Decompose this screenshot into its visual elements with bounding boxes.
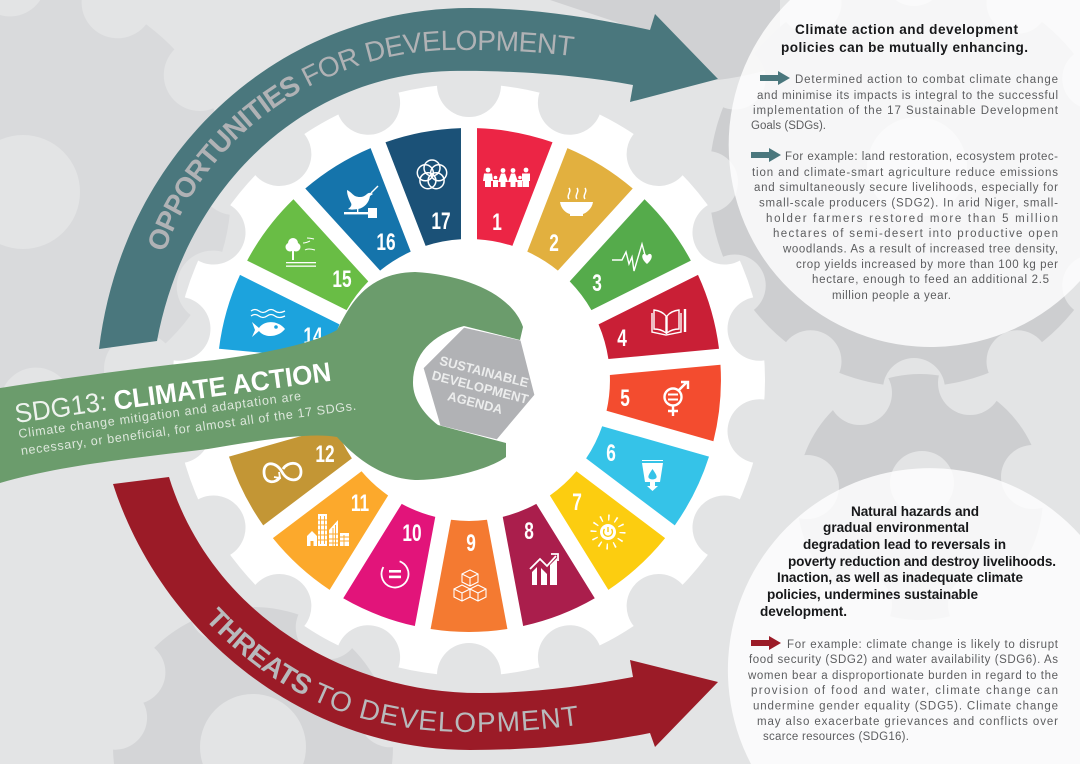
background gear: upper right [712,108,1074,384]
text block: land restoration example: small-scale producers (SDG2). In arid Niger, small- [759,198,1058,210]
heading: mutually enhancing: policies can be mutually enhancing. [781,40,1028,55]
icon: fish and waves (goal 14) [251,310,285,337]
text block: threats example [747,636,1059,743]
heading: natural hazards: degradation lead to reversals in [803,537,1006,552]
segment 17 [385,125,481,250]
background gear: top left [0,0,230,388]
segment numbers: 15 [332,266,352,293]
heading: natural hazards: gradual environmental [823,520,969,535]
heading: natural hazards: development. [760,604,847,619]
text block: land restoration example: million people a year. [832,290,951,302]
SDG wheel segments [216,125,723,632]
segment 14 [216,274,345,379]
text block: determined action: Goals (SDGs). [751,120,826,132]
text block: land restoration example: woodlands. As a result of increased tree density, [782,244,1058,256]
segment numbers: 14 [303,323,323,350]
segment 6 [577,408,712,527]
icon: partnership rings (goal 17) [417,160,447,189]
segment numbers: 17 [431,208,451,235]
text block: land restoration example: hectares of semi-desert into productive open [773,228,1058,240]
text block: determined action [751,71,1059,132]
arrow: threats to development [113,477,718,750]
text block: threats example: undermine gender equality (SDG5). Climate change [753,700,1058,712]
background gear: bottom left [113,607,393,764]
text block: land restoration example: holder farmers restored more than 5 million [766,213,1058,225]
icon: bowl (goal 2) [560,188,593,216]
icon: sun (goal 7) [594,518,622,546]
wrench: SDG13 climate action [0,272,523,483]
hexagon: sustainable development agenda: SUSTAINABLE [438,353,531,390]
icon: dove and gavel (goal 16) [344,186,378,218]
segment 16 [304,146,428,281]
panel: climate action circle [729,0,1080,347]
segment 1 [457,125,553,250]
background gear: top right wedge [550,0,780,80]
white gear wheel [174,86,765,674]
segment 15 [245,198,381,326]
segment 10 [342,496,454,629]
text block: land restoration example: crop yields increased by more than 100 kg per [796,259,1058,271]
hexagon: sustainable development agenda [423,327,535,440]
wrench: SDG13 climate action: CLIMATE ACTION [112,357,333,416]
segment numbers: 2 [549,230,559,257]
segment 11 [271,457,403,592]
text block: threats example: women bear a disproportionate burden in regard to the [747,670,1058,682]
text block: threats example: food security (SDG2) and water availability (SDG6). As [749,654,1058,666]
text block: threats example: For example: climate change is likely to disrupt [787,639,1059,651]
segment numbers: 10 [402,520,422,547]
icon: gender symbol (goal 5) [664,382,688,416]
wrench: SDG13 climate action: Climate change mitigation and adaptation are [18,389,302,441]
segment 8 [484,496,596,629]
segment 2 [510,146,634,281]
segment numbers: 8 [524,518,534,545]
wrench: SDG13 climate action: SDG13: [13,386,109,429]
icon: water (goal 6) [642,460,663,491]
text block: land restoration example [751,148,1058,302]
icon: infinity (goal 12) [264,463,301,482]
segment numbers: 1 [492,209,502,236]
icon: heartbeat (goal 3) [612,244,652,271]
text block: land restoration example: tion and climate-smart agriculture reduce emissions [752,167,1058,179]
heading: natural hazards [760,504,1056,619]
segment numbers: 4 [617,325,627,352]
heading: natural hazards: poverty reduction and destroy livelihoods. [788,554,1056,569]
segment numbers: 9 [466,530,476,557]
text block: land restoration example: and simultaneously secure livelihoods, especially for [754,182,1058,194]
text block: determined action: implementation of the 17 Sustainable Development [753,105,1059,117]
heading: mutually enhancing: Climate action and development [795,22,1018,37]
text block: threats example: scarce resources (SDG16). [763,731,909,743]
text block: threats example: may also exacerbate grievances and conflicts over [757,716,1058,728]
segment numbers: 16 [376,229,396,256]
text block: determined action: Determined action to combat climate change [795,74,1058,86]
heading: natural hazards: Inaction, as well as inadequate climate [777,570,1023,585]
heading: mutually enhancing [781,22,1028,55]
segment numbers: 5 [620,385,630,412]
segment 4 [593,274,722,379]
hexagon: sustainable development agenda: AGENDA [446,388,505,417]
heading: natural hazards: policies, undermines sustainable [767,587,978,602]
arrow: threats to development: THREATS TO DEVELOPMENT [209,606,577,732]
segment 7 [535,457,667,592]
icon: reduced inequality (goal 10) [378,557,412,591]
segment numbers [303,208,630,557]
segment 12 [226,408,361,527]
segment numbers: 6 [606,440,616,467]
segment 5 [605,355,723,441]
text block: land restoration example: For example: land restoration, ecosystem protec- [785,151,1058,163]
text block: threats example: provision of food and water, climate change can [751,685,1058,697]
icon: book (goal 4) [652,309,685,335]
segment numbers: 7 [572,489,582,516]
heading: natural hazards: Natural hazards and [851,504,979,519]
segment 3 [557,198,693,326]
icon: growth chart (goal 8) [530,554,558,585]
arrow: opportunities for development: OPPORTUNITIES FOR DEVELOPMENT [149,30,574,250]
icon: family (goal 1) [483,168,530,187]
text block: land restoration example: hectare, enough to feed an additional 2.5 [812,274,1049,286]
background gear: lower right [804,374,1032,490]
hexagon: sustainable development agenda: DEVELOPMENT [430,367,530,407]
panel: threats circle [728,468,1080,764]
icon: city (goal 11) [307,514,349,546]
text block: determined action: and minimise its impacts is integral to the successful [757,90,1058,102]
segment numbers: 3 [592,270,602,297]
icon: tree and birds (goal 15) [286,238,316,267]
icon: cubes (goal 9) [454,570,486,601]
segment numbers: 12 [315,441,335,468]
arrow: opportunities for development [99,8,718,349]
wrench: SDG13 climate action: necessary, or beneficial, for almost all of the 17 SDGs. [20,399,357,458]
segment numbers: 11 [351,490,369,517]
segment 9 [431,520,507,632]
